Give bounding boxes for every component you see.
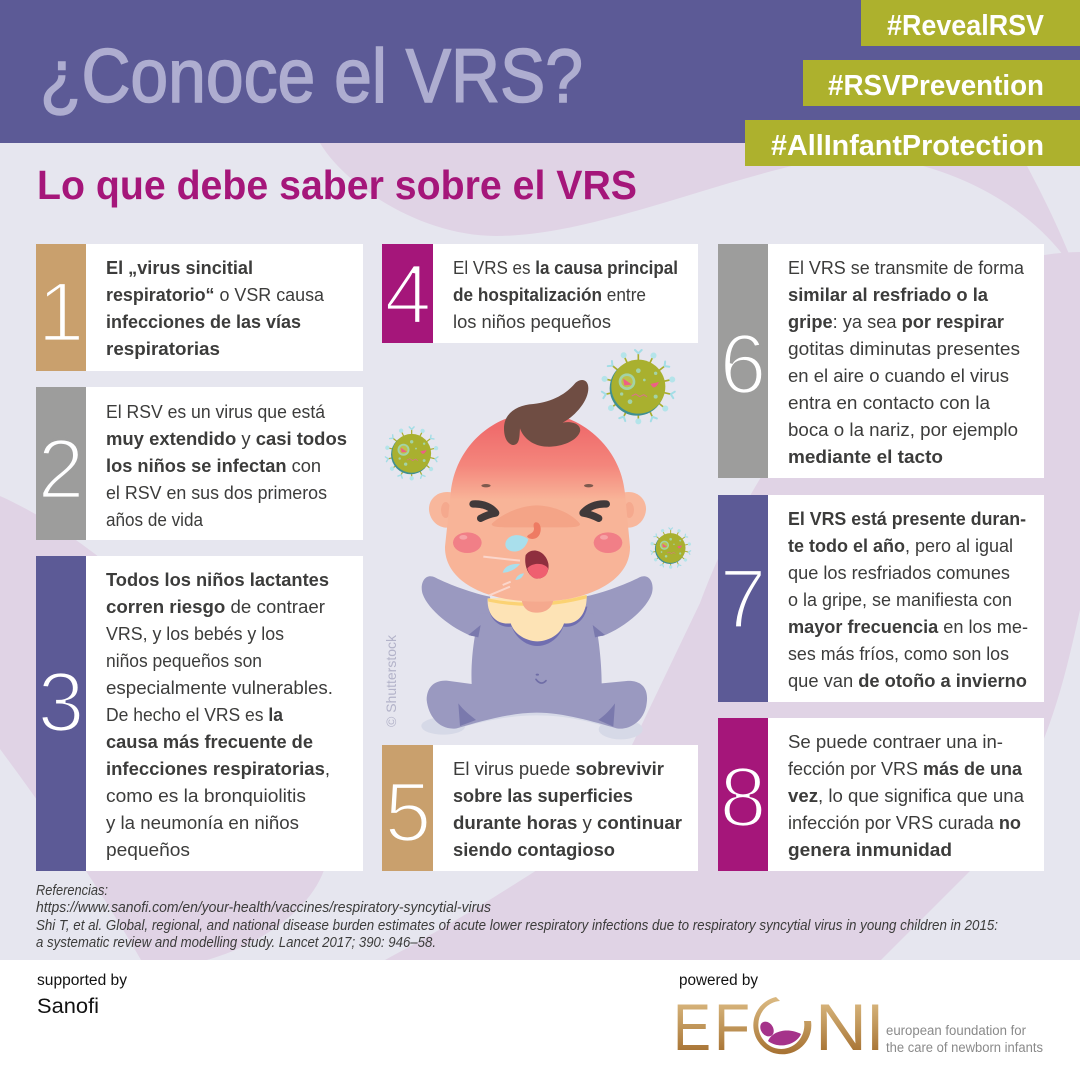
text 8: genera inmunidad — [788, 839, 952, 860]
text 6 — [788, 257, 1025, 467]
powered by: powered by — [679, 972, 758, 989]
text 6: entra en contacto con la — [788, 392, 991, 413]
panel 3 — [36, 556, 363, 871]
text 3: niños pequeños son — [106, 650, 262, 671]
text 8: vez, lo que significa que una — [788, 785, 1025, 806]
text 4 — [453, 257, 678, 332]
text 1 — [106, 257, 325, 359]
text 7: mayor frecuencia en los me- — [788, 616, 1028, 637]
supported by: supported by — [37, 972, 127, 989]
tag: RSVPrevention — [803, 60, 1080, 106]
text 6: El VRS se transmite de forma — [788, 257, 1025, 278]
nose band — [492, 505, 580, 527]
text 6: boca o la nariz, por ejemplo — [788, 419, 1018, 440]
text 6: gripe: ya sea por respirar — [788, 311, 1004, 332]
text 4: de hospitalización entre — [453, 284, 646, 305]
text 6: mediante el tacto — [788, 446, 943, 467]
text 3: De hecho el VRS es la — [106, 704, 284, 725]
icon: virus large — [601, 350, 676, 424]
eyebrows — [481, 484, 593, 487]
text 3: especialmente vulnerables. — [106, 677, 333, 698]
text 2: años de vida — [106, 509, 204, 530]
references: Referencias: — [36, 883, 108, 899]
icon: virus medium — [385, 427, 439, 480]
bib — [488, 595, 587, 646]
text 2: los niños se infectan con — [106, 455, 321, 476]
supported by — [37, 972, 127, 1018]
panel 8 — [718, 718, 1044, 871]
text 2: el RSV en sus dos primeros — [106, 482, 327, 503]
title: ¿Conoce el VRS? — [40, 34, 583, 119]
supported by: Sanofi — [37, 995, 99, 1018]
text 1: infecciones de las vías — [106, 311, 301, 332]
text 6: en el aire o cuando el virus — [788, 365, 1009, 386]
text 7: o la gripe, se manifiesta con — [788, 589, 1012, 610]
mouth — [525, 550, 549, 579]
number 4: 4 — [385, 247, 431, 341]
ground shadow — [421, 712, 643, 739]
eyes — [473, 504, 606, 518]
references: https://www.sanofi.com/en/your-health/vaccines/respiratory-syncytial-virus — [36, 900, 491, 916]
number 8: 8 — [720, 750, 766, 844]
text 7: El VRS está presente duran- — [788, 508, 1026, 529]
baby suit — [422, 576, 653, 729]
text 1: respiratorias — [106, 338, 220, 359]
text 2 — [106, 401, 347, 530]
text 8: Se puede contraer una in- — [788, 731, 1003, 752]
text 7: que los resfriados comunes — [788, 562, 1010, 583]
panel 5 — [382, 745, 698, 871]
text 2: El RSV es un virus que está — [106, 401, 326, 422]
logo: EFCNI: E — [673, 990, 711, 1064]
icon: virus small — [650, 528, 691, 569]
logo: EFCNI: I — [866, 990, 884, 1064]
panel 6 — [718, 244, 1044, 478]
text 5: siendo contagioso — [453, 839, 615, 860]
text 4: El VRS es la causa principal — [453, 257, 678, 278]
logo: EFCNI: N — [815, 990, 867, 1064]
hashtag tags — [745, 0, 1080, 166]
text 3: como es la bronquiolitis — [106, 785, 306, 806]
logo: EFCNI: F — [714, 990, 750, 1064]
logo tagline: european foundation for — [886, 1023, 1026, 1038]
cheeks — [453, 532, 622, 553]
references: Shi T, et al. Global, regional, and national disease burden estimates of acute lower respiratory infections due to respiratory syncytial virus in young children in 2015: — [36, 918, 998, 934]
tag: AllInfantProtection — [745, 120, 1080, 166]
text 3 — [106, 569, 333, 860]
text 7: te todo el año, pero al igual — [788, 535, 1013, 556]
head — [445, 413, 630, 602]
text 1: respiratorio“ o VSR causa — [106, 284, 325, 305]
panel 1 — [36, 244, 363, 371]
number 5: 5 — [385, 765, 431, 859]
logo tagline — [886, 1023, 1043, 1055]
text 5: El virus puede sobrevivir — [453, 758, 664, 779]
text 6: similar al resfriado o la — [788, 284, 989, 305]
text 5: durante horas y continuar — [453, 812, 682, 833]
text 7 — [788, 508, 1028, 691]
text 3: VRS, y los bebés y los — [106, 623, 284, 644]
number 3: 3 — [38, 655, 84, 749]
text 3: Todos los niños lactantes — [106, 569, 329, 590]
text 2: muy extendido y casi todos — [106, 428, 347, 449]
text 7: ses más fríos, como son los — [788, 643, 1009, 664]
neck — [522, 600, 553, 613]
nose drip and sneeze droplets — [483, 522, 541, 595]
logo: EFCNI — [673, 990, 884, 1064]
tag: RSVPrevention: #RSVPrevention — [828, 70, 1044, 102]
number 1: 1 — [38, 265, 84, 359]
text 8: infección por VRS curada no — [788, 812, 1021, 833]
credit: Shutterstock: © Shutterstock — [383, 634, 399, 727]
text 3: pequeños — [106, 839, 190, 860]
subtitle: Lo que debe saber sobre el VRS — [37, 162, 637, 208]
panel 4 — [382, 244, 698, 343]
text 5 — [453, 758, 682, 860]
text 3: infecciones respiratorias, — [106, 758, 330, 779]
references — [36, 883, 998, 951]
header band — [0, 0, 1080, 143]
text 4: los niños pequeños — [453, 311, 611, 332]
references: a systematic review and modelling study. Lancet 2017; 390: 946–58. — [36, 935, 436, 951]
text 1: El „virus sincitial — [106, 257, 253, 278]
tag: RevealRSV: #RevealRSV — [887, 10, 1045, 42]
number 6: 6 — [720, 317, 766, 411]
text 3: corren riesgo de contraer — [106, 596, 325, 617]
text 5: sobre las superficies — [453, 785, 633, 806]
number 7: 7 — [720, 552, 766, 646]
text 7: que van de otoño a invierno — [788, 670, 1027, 691]
text 8 — [788, 731, 1025, 860]
panel 2 — [36, 387, 363, 540]
tag: AllInfantProtection: #AllInfantProtection — [771, 130, 1044, 162]
number 2: 2 — [38, 422, 84, 516]
tag: RevealRSV — [861, 0, 1080, 46]
illustration: sneezing baby — [385, 350, 691, 739]
logo tagline: the care of newborn infants — [886, 1040, 1043, 1055]
hair — [504, 380, 588, 447]
text 8: fección por VRS más de una — [788, 758, 1023, 779]
text 6: gotitas diminutas presentes — [788, 338, 1020, 359]
text 3: causa más frecuente de — [106, 731, 313, 752]
panel 7 — [718, 495, 1044, 702]
text 3: y la neumonía en niños — [106, 812, 299, 833]
ears — [429, 492, 646, 528]
